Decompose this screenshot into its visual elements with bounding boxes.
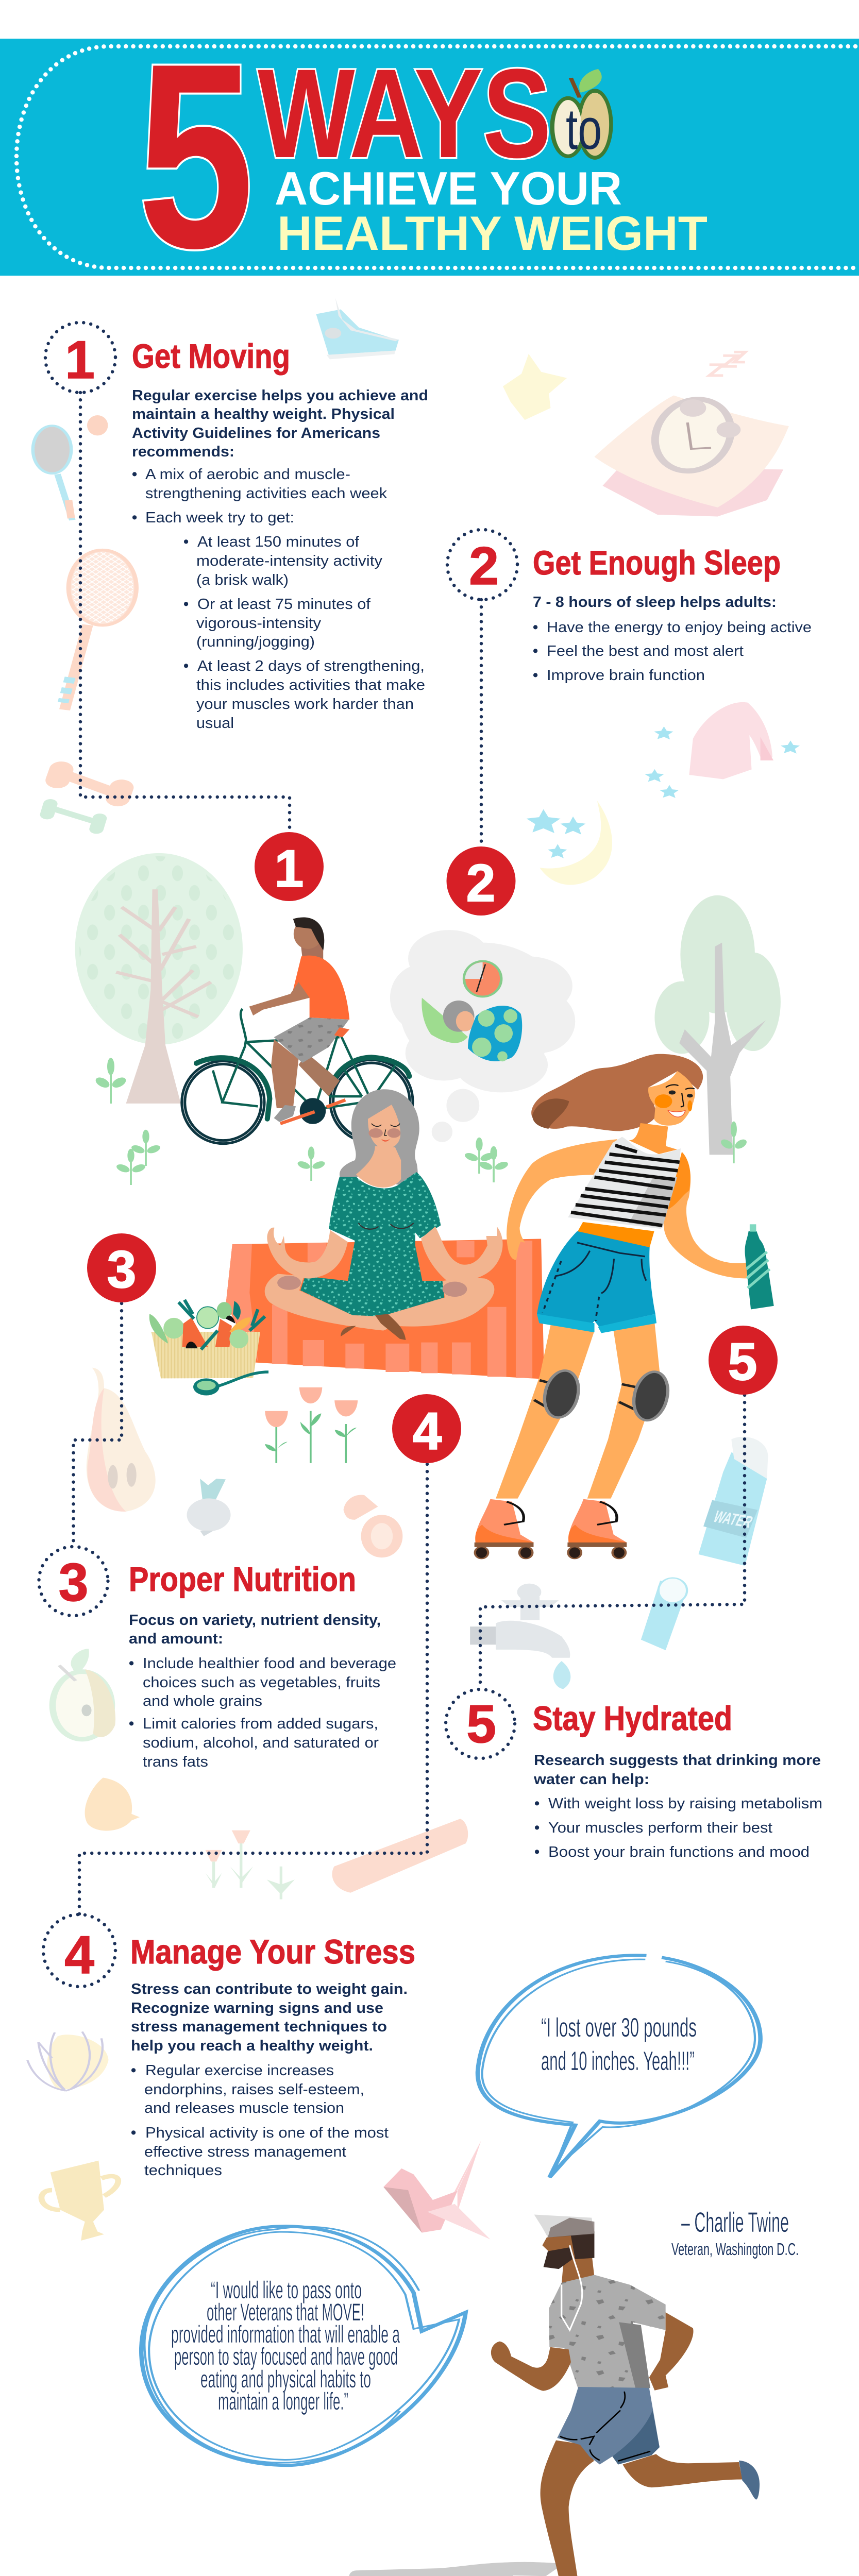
bullet list: • [534, 1844, 540, 1860]
bullet list: • [534, 1820, 540, 1836]
body and clothes [507, 1071, 749, 1333]
bullet list: • [533, 643, 538, 659]
pale icon: pear [87, 1368, 156, 1512]
intro text: Activity Guidelines for Americans [132, 425, 380, 442]
apple icon with to [550, 69, 613, 161]
step 4 dotted badge: 4 [64, 1925, 94, 1985]
step 3 dotted badge [39, 1547, 108, 1616]
pale icons: night cap and stars [527, 702, 800, 835]
bullet list: moderate-intensity activity [196, 553, 383, 569]
speech bubble: veteran quote [141, 2226, 466, 2465]
bullet list: Your muscles perform their best [548, 1820, 772, 1836]
attribution [671, 2206, 799, 2259]
section 1: Get Moving [45, 323, 428, 732]
bullet list: Boost your brain functions and mood [548, 1844, 810, 1860]
marker 1 [255, 832, 324, 901]
quote text: eating and physical habits to [200, 2365, 371, 2393]
intro text: help you reach a healthy weight. [131, 2038, 373, 2054]
intro text: Recognize warning signs and use [131, 2000, 383, 2016]
bullet list: Include healthier food and beverage [143, 1655, 396, 1672]
step 2 dotted badge: 2 [469, 536, 499, 596]
bullet list: and whole grains [143, 1693, 262, 1709]
pale icon: moon [540, 801, 612, 885]
dotted connector 3 [73, 1303, 122, 1546]
bullet list: sodium, alcohol, and saturated or [143, 1735, 379, 1751]
hair [531, 1054, 703, 1131]
pale icons: water: WATER [711, 1507, 756, 1531]
runner legs and shorts [491, 2342, 760, 2576]
illustration: thought cloud [390, 930, 575, 1142]
intro text [131, 1981, 408, 2054]
illustration: meditating woman [265, 1089, 503, 1340]
bullet list: vigorous-intensity [196, 615, 322, 632]
section 3: Proper Nutrition [39, 1547, 396, 1770]
intro text [132, 387, 428, 460]
quote text: “I lost over 30 pounds [541, 2013, 697, 2043]
bullet list: Or at least 75 minutes of [197, 596, 371, 613]
intro text: water can help: [533, 1771, 649, 1788]
dotted connector 4 [79, 1464, 427, 1916]
bullet list [533, 619, 812, 684]
section 4: Manage Your Stress [43, 1914, 415, 2179]
header banner [0, 9, 859, 303]
numbered markers [87, 832, 778, 1463]
dotted connector 1 [80, 393, 290, 827]
section 2: Get Enough Sleep [447, 530, 812, 684]
bullet list: trans fats [143, 1754, 208, 1770]
bullet list: effective stress management [144, 2144, 346, 2160]
illustration: sleeping person [422, 998, 522, 1061]
legs and knee pads [496, 1323, 672, 1499]
intro text: Research suggests that drinking more [534, 1752, 821, 1769]
marker 2: 2 [466, 854, 495, 912]
bullet list: • [533, 619, 538, 636]
bullet list: Feel the best and most alert [547, 643, 744, 659]
step 5 dotted badge: 5 [466, 1694, 496, 1754]
bullet list: Have the energy to enjoy being active [547, 619, 812, 636]
heading: Manage Your Stress [130, 1933, 415, 1971]
bullet list: (a brisk walk) [196, 572, 289, 588]
bullet list: Each week try to get: [145, 510, 294, 526]
illustration: ground shadow [99, 2562, 763, 2576]
step 2 dotted badge [447, 530, 517, 600]
marker 3 [87, 1233, 156, 1302]
section 5: Stay Hydrated [446, 1689, 822, 1860]
runner head and torso [534, 2214, 694, 2391]
intro text: Regular exercise helps you achieve and [132, 387, 428, 404]
illustration: salad basket [149, 1300, 265, 1378]
bullet list: • [533, 667, 538, 684]
bullet list: • [129, 1655, 134, 1672]
heading: Get Moving [132, 337, 290, 375]
heading: Proper Nutrition [129, 1560, 356, 1598]
roller skates [475, 1499, 627, 1558]
marker 2 [446, 846, 515, 916]
bullet list: (running/jogging) [196, 634, 315, 650]
intro text: 7 - 8 hours of sleep helps adults: [533, 594, 777, 611]
quote text: maintain a longer life.” [218, 2387, 348, 2415]
marker 3: 3 [107, 1240, 136, 1299]
bullet list: your muscles work harder than [196, 696, 414, 713]
heading: Get Enough Sleep [533, 544, 781, 582]
heading: Stay Hydrated [533, 1699, 732, 1737]
bullet list: • [183, 596, 189, 613]
bullet list: • [183, 534, 189, 550]
intro text: stress management techniques to [131, 2019, 387, 2035]
bullet list: With weight loss by raising metabolism [548, 1795, 822, 1812]
illustration: sprouts [94, 1058, 748, 1185]
marker 5 [709, 1326, 778, 1395]
bullet list [534, 1795, 822, 1860]
quote text: provided information that will enable a [171, 2320, 400, 2348]
bullet list: and releases muscle tension [144, 2100, 344, 2116]
bullet list [131, 2062, 389, 2179]
intro text: Stress can contribute to weight gain. [131, 1981, 408, 1997]
marker 4: 4 [413, 1402, 442, 1461]
pale icons: flowers and yoga mat [206, 1819, 468, 1900]
illustration: left tree [75, 853, 243, 1104]
bullet list [132, 466, 425, 732]
quote text: “I would like to pass onto [211, 2276, 362, 2303]
bullet list: Limit calories from added sugars, [143, 1716, 378, 1732]
illustration: spoon [193, 1372, 268, 1395]
pale icons: sports [33, 298, 399, 829]
quote text: person to stay focused and have good [174, 2343, 398, 2370]
marker 1: 1 [275, 839, 304, 898]
illustration: origami crane [383, 2141, 490, 2240]
pale icons: vegetables [49, 1479, 402, 1831]
step 1 dotted badge: 1 [65, 330, 95, 390]
quote text [541, 2013, 697, 2076]
bullet list: • [132, 466, 137, 483]
pale icons: calm [27, 2031, 118, 2241]
bullet list: • [131, 2062, 136, 2079]
bullet list: choices such as vegetables, fruits [143, 1674, 380, 1691]
bullet list: strengthening activities each week [145, 485, 388, 502]
dotted connector 5 [480, 1395, 745, 1689]
pale icons: sleep [503, 352, 789, 516]
water bottle [745, 1224, 774, 1309]
quote text: and 10 inches. Yeah!!!” [541, 2046, 695, 2076]
bullet list: At least 150 minutes of [197, 534, 360, 550]
pale icons: water [470, 1437, 768, 1689]
bullet list: • [183, 658, 189, 674]
subtitle line two: HEALTHY WEIGHT [277, 206, 708, 260]
bullet list: techniques [144, 2162, 222, 2179]
bullet list: A mix of aerobic and muscle- [145, 466, 350, 483]
quote text: other Veterans that MOVE! [207, 2298, 364, 2326]
intro text [129, 1612, 381, 1647]
marker 4 [392, 1394, 461, 1463]
subtitle line one: ACHIEVE YOUR [275, 163, 622, 215]
intro text: Focus on variety, nutrient density, [129, 1612, 381, 1629]
title word WAYS: WAYS [258, 43, 551, 184]
marker 5: 5 [728, 1332, 757, 1391]
illustration: picnic blanket [226, 1239, 544, 1379]
illustration: cyclist [183, 917, 411, 1142]
bullet list: • [131, 2125, 136, 2141]
step 3 dotted badge: 3 [59, 1553, 88, 1613]
illustration: right tree [654, 895, 781, 1155]
step 4 dotted badge [43, 1914, 115, 1987]
illustration: runner [491, 2214, 760, 2576]
intro text: recommends: [132, 444, 234, 460]
illustration: roller skater [475, 1054, 774, 1558]
bullet list: • [132, 510, 137, 526]
speech bubble: result quote [478, 1955, 761, 2178]
bullet list: endorphins, raises self-esteem, [144, 2081, 364, 2098]
bullet list: Improve brain function [547, 667, 705, 684]
step 1 dotted badge [45, 323, 115, 393]
intro text: and amount: [129, 1631, 223, 1647]
intro text: maintain a healthy weight. Physical [132, 406, 395, 422]
intro text [533, 1752, 821, 1788]
title numeral 5: 5 [138, 9, 254, 303]
bullet list: • [534, 1795, 540, 1812]
bicycle [183, 1009, 411, 1142]
bullet list [129, 1655, 396, 1770]
bullet list: usual [196, 715, 234, 732]
step 5 dotted badge [446, 1689, 515, 1758]
illustration: tulips [265, 1387, 358, 1463]
bullet list: • [129, 1716, 134, 1732]
bullet list: this includes activities that make [196, 677, 425, 693]
bullet list: Physical activity is one of the most [145, 2125, 389, 2141]
bullet list: Regular exercise increases [145, 2062, 334, 2079]
quote text [171, 2276, 400, 2415]
dotted connector 2 [480, 600, 483, 842]
rider [249, 917, 349, 1122]
apple icon with to: to [566, 97, 602, 161]
bullet list: At least 2 days of strengthening, [197, 658, 425, 674]
